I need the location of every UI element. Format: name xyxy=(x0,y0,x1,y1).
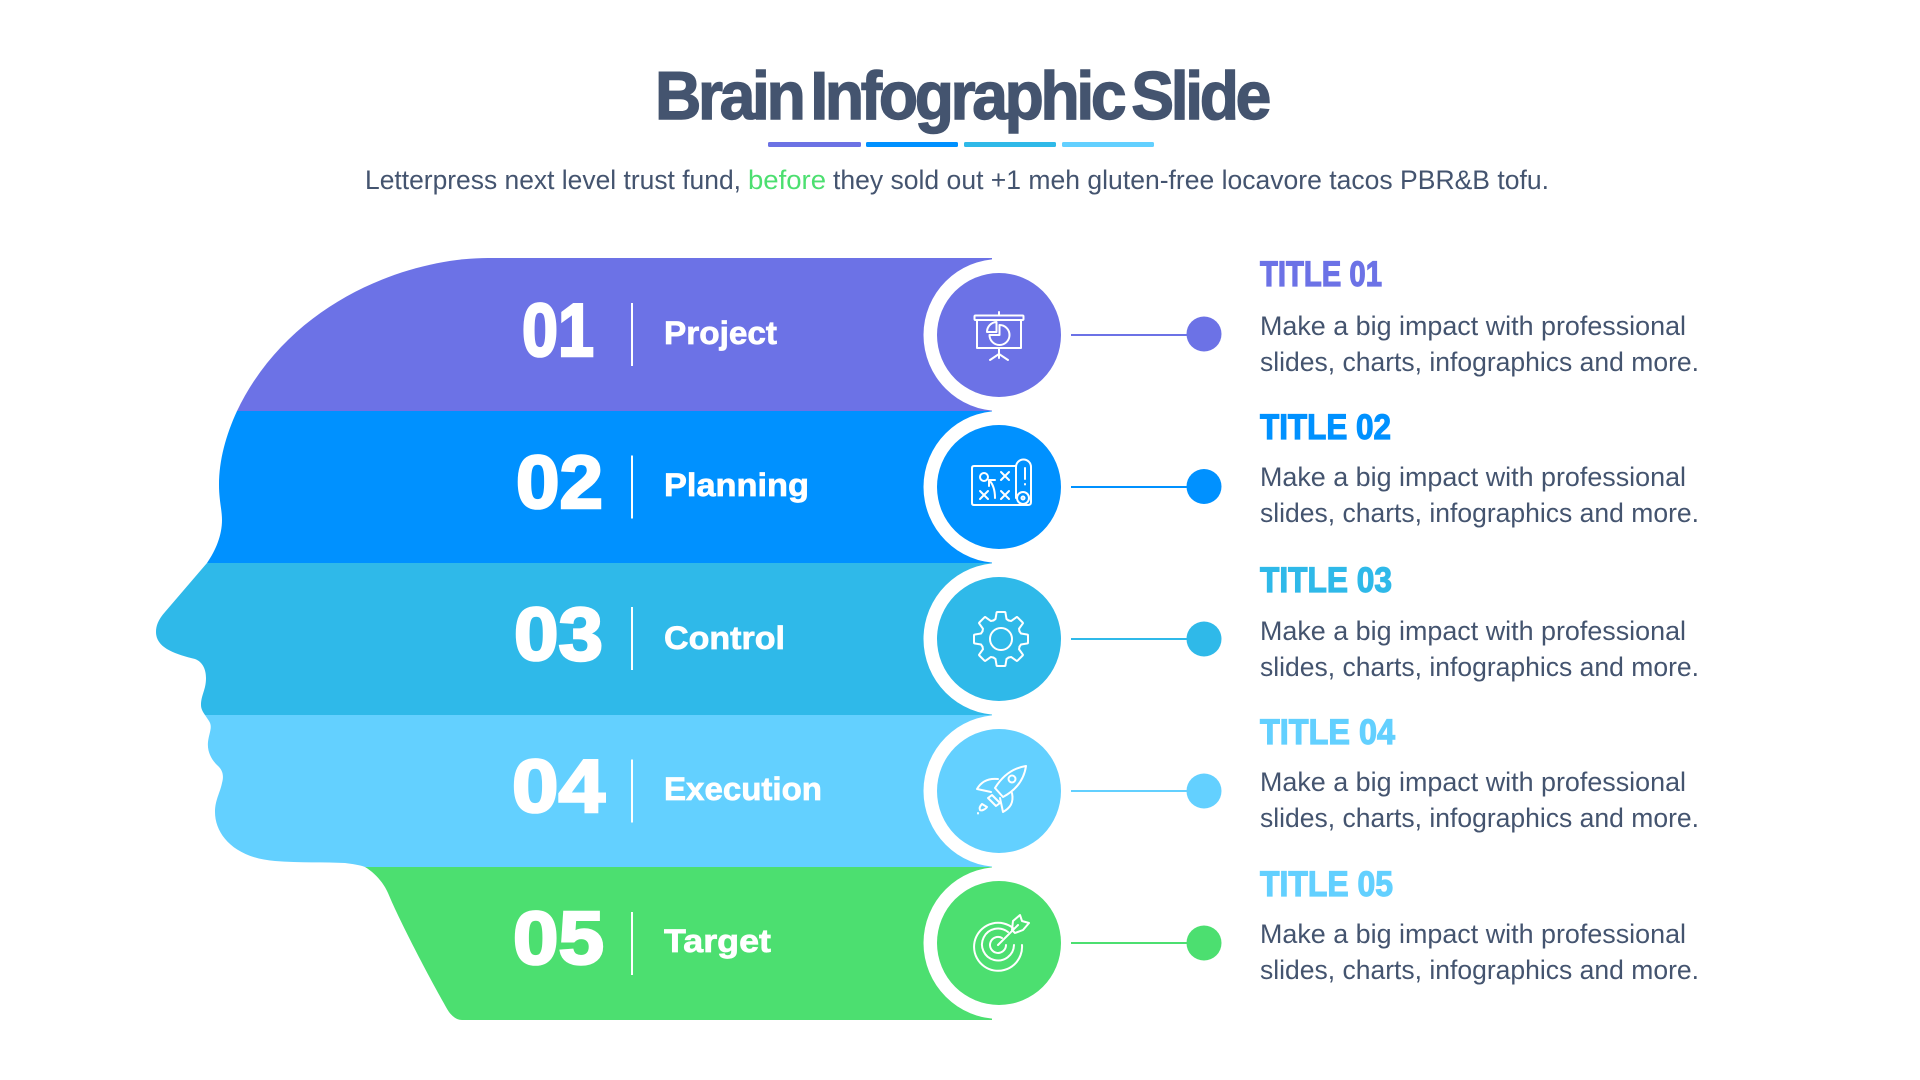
connector 05 xyxy=(1071,926,1222,960)
text block 03: Make a big impact with professional xyxy=(1260,616,1686,646)
text block 01: Make a big impact with professional xyxy=(1260,311,1686,341)
step 03 number and label xyxy=(514,592,785,676)
head band 01 xyxy=(237,258,992,411)
text block 02: Make a big impact with professional xyxy=(1260,462,1686,492)
circle 03 with gear icon xyxy=(924,563,1076,715)
subtitle: before xyxy=(748,165,826,195)
text block 02: slides, charts, infographics and more. xyxy=(1260,498,1699,528)
title: Brain Infographic Slide xyxy=(655,58,1270,134)
circle 05 with target icon xyxy=(924,867,1076,1019)
circle 02 with strategy map icon xyxy=(924,411,1076,563)
connector 02 xyxy=(1071,469,1222,504)
text block 04: Make a big impact with professional xyxy=(1260,767,1686,797)
subtitle: Letterpress next level trust fund, xyxy=(365,165,741,195)
step 04 number and label: Execution xyxy=(664,771,822,807)
connector 03 xyxy=(1071,622,1222,656)
step 05 number and label: 05 xyxy=(513,896,604,980)
text block 05: TITLE 05 xyxy=(1260,865,1393,904)
step 03 number and label: Control xyxy=(664,620,785,656)
head band 04 xyxy=(205,715,992,867)
connector 01 xyxy=(1071,316,1222,352)
step 03 number and label: 03 xyxy=(514,592,603,676)
step 01 number and label xyxy=(522,288,777,372)
head band 05 xyxy=(365,867,992,1020)
step 04 number and label xyxy=(512,744,822,828)
text block 01: TITLE 01 xyxy=(1260,255,1382,294)
text block 05 xyxy=(1260,865,1699,985)
step 02 number and label: 02 xyxy=(516,440,603,524)
text block 01: slides, charts, infographics and more. xyxy=(1260,347,1699,377)
text block 04 xyxy=(1260,713,1699,833)
subtitle: they sold out +1 meh gluten-free locavore tacos PBR&B tofu. xyxy=(833,165,1549,195)
step 05 number and label xyxy=(513,896,771,980)
text block 04: slides, charts, infographics and more. xyxy=(1260,803,1699,833)
head band 03 xyxy=(156,563,992,715)
circle 04 with rocket icon xyxy=(924,715,1076,867)
text block 02: TITLE 02 xyxy=(1260,408,1391,447)
text block 03: TITLE 03 xyxy=(1260,561,1392,600)
connector 04 xyxy=(1071,774,1222,808)
text block 04: TITLE 04 xyxy=(1260,713,1395,752)
subtitle xyxy=(365,165,1549,195)
circle 01 with presentation icon xyxy=(924,259,1076,411)
title underline bars xyxy=(768,142,1154,147)
text block 01 xyxy=(1260,255,1699,377)
step 01 number and label: Project xyxy=(664,315,777,351)
text block 03 xyxy=(1260,561,1699,682)
text block 02 xyxy=(1260,408,1699,528)
step 04 number and label: 04 xyxy=(512,744,605,828)
step 02 number and label xyxy=(516,440,809,524)
text block 05: Make a big impact with professional xyxy=(1260,919,1686,949)
step 05 number and label: Target xyxy=(664,923,771,959)
text block 05: slides, charts, infographics and more. xyxy=(1260,955,1699,985)
step 01 number and label: 01 xyxy=(522,288,594,372)
text block 03: slides, charts, infographics and more. xyxy=(1260,652,1699,682)
head band 02 xyxy=(207,411,992,563)
step 02 number and label: Planning xyxy=(664,467,809,503)
